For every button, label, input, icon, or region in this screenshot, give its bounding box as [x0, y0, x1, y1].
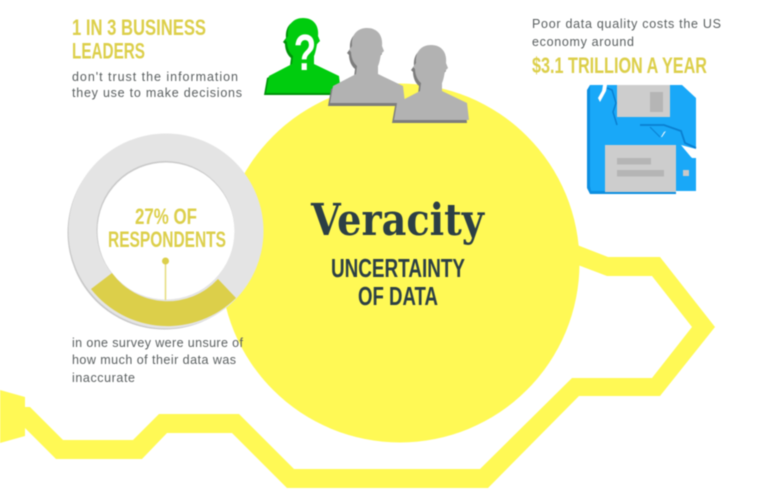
donut label: RESPONDENTS [108, 227, 226, 252]
heading: 1 in 3 business leaders [72, 15, 206, 64]
heading: 1 in 3 business leaders: 1 IN 3 BUSINESS [72, 15, 206, 40]
connector band [0, 243, 715, 488]
text: survey note [72, 336, 244, 385]
text: survey note: in one survey were unsure of [72, 336, 244, 350]
subtitle: uncertainty of data: OF DATA [358, 281, 438, 311]
donut label: 27% OF [135, 204, 197, 229]
donut pin [162, 258, 169, 300]
donut highlighted segment [91, 273, 236, 326]
heading: $3.1 trillion a year: $3.1 TRILLION A YEAR [532, 53, 707, 78]
icon: grey person right [392, 45, 469, 123]
title: Veracity: Veracity [310, 195, 485, 246]
subtitle: uncertainty of data [331, 253, 465, 311]
text: cost of poor data: economy around [532, 35, 634, 49]
text: trust in information: don't trust the information [72, 70, 238, 84]
icon: grey person middle [328, 28, 405, 106]
text: trust in information [72, 70, 242, 100]
central circle [220, 84, 580, 442]
donut label [108, 204, 226, 252]
text: cost of poor data [532, 17, 721, 49]
text: trust in information: they use to make decisions [72, 86, 242, 100]
text: cost of poor data: Poor data quality costs the US [532, 17, 721, 31]
heading: 1 in 3 business leaders: LEADERS [72, 38, 145, 64]
floppy lower label [605, 145, 676, 192]
icon: three people [264, 18, 469, 123]
text: survey note: inaccurate [72, 371, 135, 385]
donut chart: 27% of respondents [68, 134, 264, 330]
subtitle: uncertainty of data: UNCERTAINTY [331, 253, 465, 283]
icon: broken floppy disk [587, 85, 696, 194]
floppy upper label [617, 85, 670, 117]
icon: green person with question mark [264, 18, 341, 95]
icon: green person with question mark: ? [294, 25, 316, 81]
text: survey note: how much of their data was [72, 353, 236, 367]
